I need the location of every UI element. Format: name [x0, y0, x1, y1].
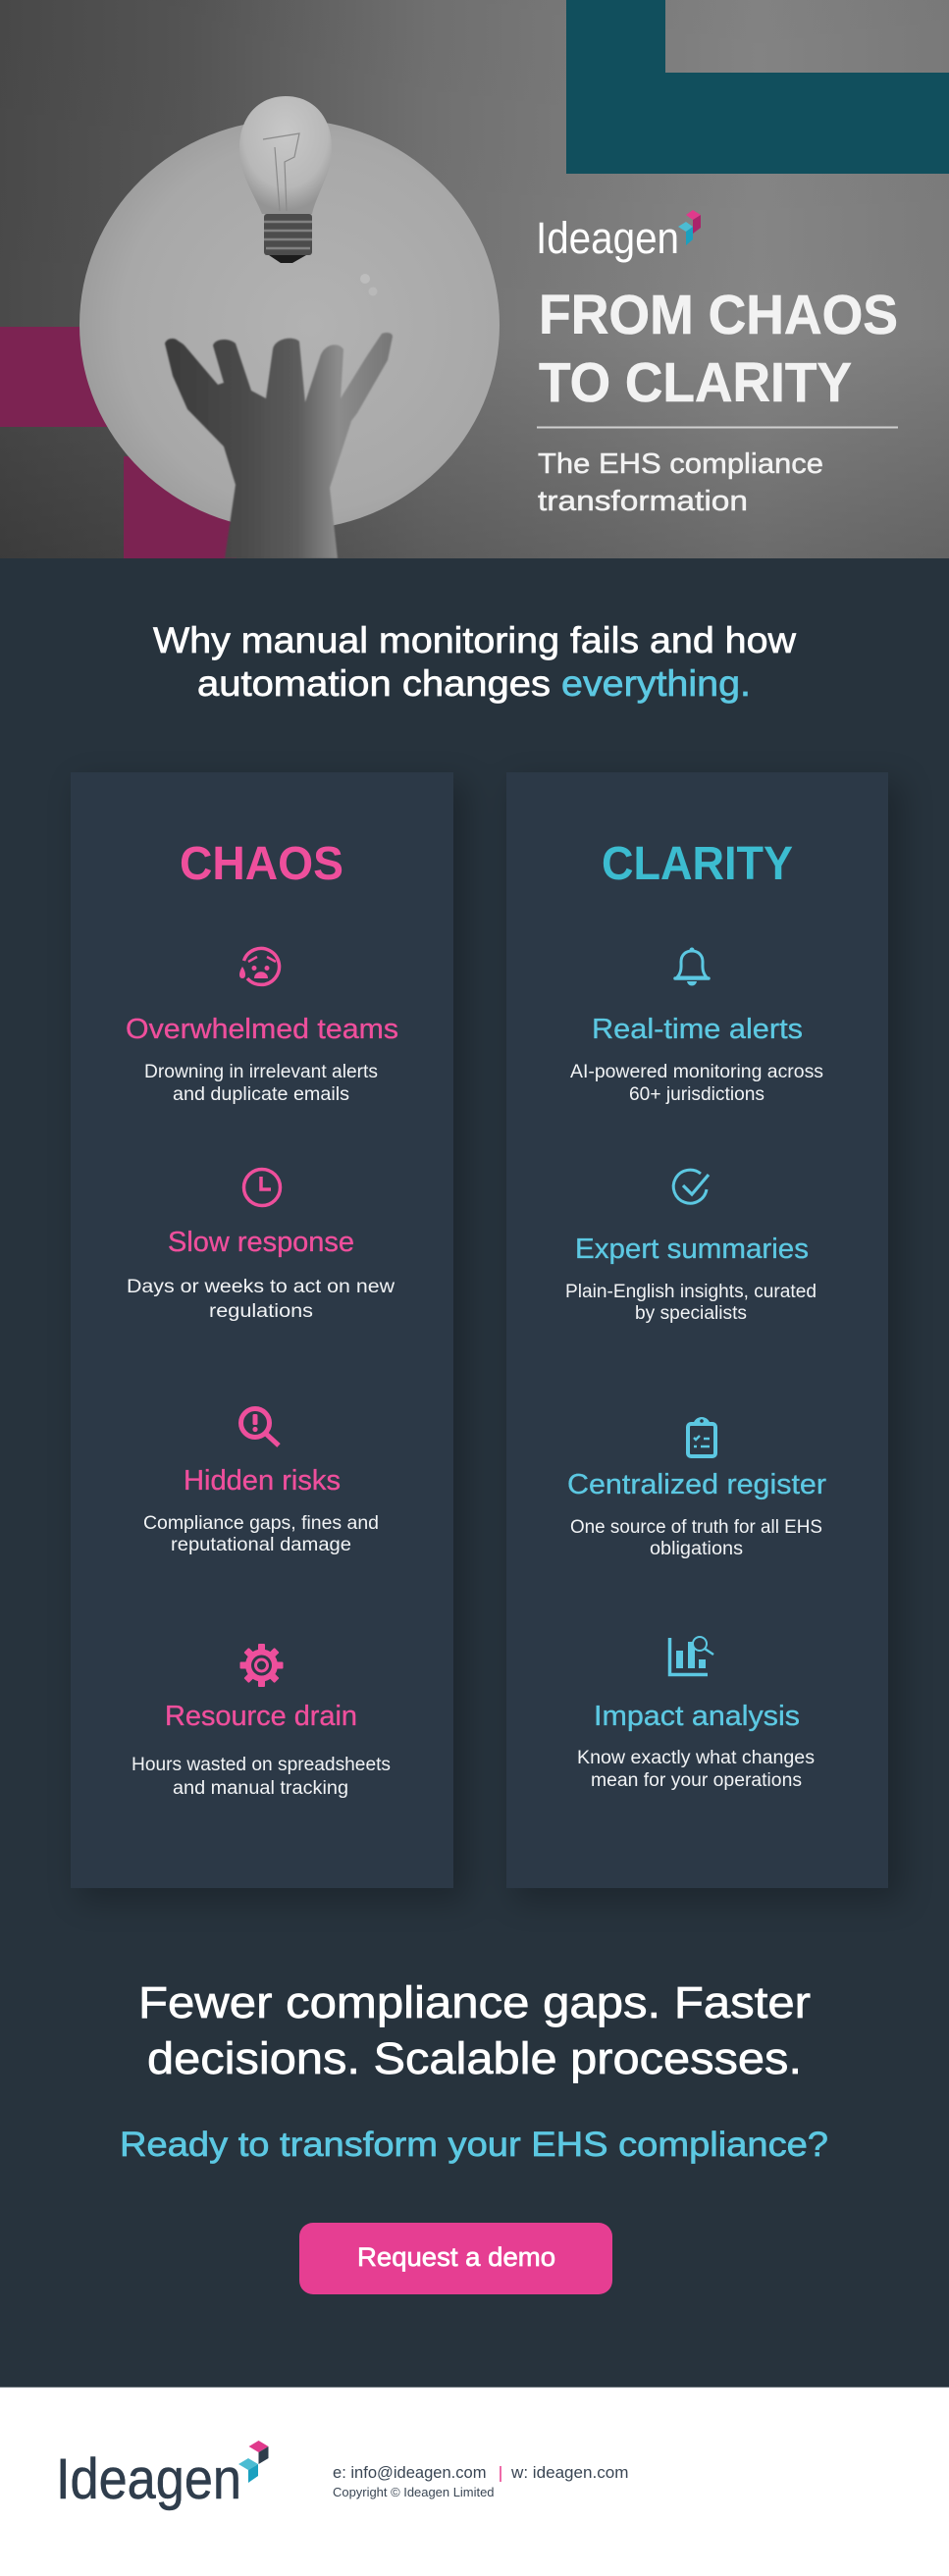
hero photo background — [0, 0, 949, 558]
item: impact analysis — [577, 1701, 815, 1791]
item: hidden risks: reputational damage — [171, 1535, 351, 1555]
item: resource drain: Hours wasted on spreadsheets — [132, 1755, 391, 1775]
item: real-time alerts: 60+ jurisdictions — [629, 1084, 764, 1105]
magenta block left — [0, 327, 118, 427]
closing statement — [138, 1977, 811, 2083]
icon: clock — [243, 1170, 281, 1205]
item: centralized register — [567, 1469, 826, 1559]
intro heading: everything. — [561, 663, 751, 704]
light disc — [79, 120, 500, 530]
item: overwhelmed teams — [126, 1014, 398, 1105]
intro heading — [153, 620, 796, 704]
item: overwhelmed teams: Overwhelmed teams — [126, 1014, 398, 1045]
item: impact analysis: mean for your operations — [591, 1770, 802, 1791]
item: overwhelmed teams: and duplicate emails — [173, 1084, 349, 1105]
subtitle — [537, 426, 898, 517]
magenta block bottom — [124, 456, 237, 558]
subtitle: The EHS compliance — [538, 448, 823, 480]
item: resource drain — [132, 1701, 391, 1799]
button: request a demo — [299, 2223, 612, 2294]
icon: clipboard — [688, 1417, 715, 1456]
item: hidden risks — [143, 1465, 379, 1555]
light bulb — [239, 96, 377, 296]
item: hidden risks: Compliance gaps, fines and — [143, 1513, 379, 1534]
item: impact analysis: Know exactly what changes — [577, 1748, 815, 1768]
teal corner shape — [566, 0, 949, 174]
button: request a demo: Request a demo — [357, 2242, 555, 2272]
panel: clarity — [506, 772, 888, 1888]
item: slow response: Days or weeks to act on new — [127, 1277, 395, 1297]
closing statement: Fewer compliance gaps. Faster — [138, 1977, 811, 2027]
item: centralized register: obligations — [650, 1539, 743, 1559]
logo: Ideagen: Ideagen — [56, 2447, 241, 2511]
icon: check circle — [673, 1170, 709, 1203]
chaos heading: CHAOS — [180, 838, 343, 890]
logo: Ideagen white: Ideagen — [536, 213, 679, 263]
icon: gear — [239, 1644, 283, 1687]
panel: chaos — [71, 772, 453, 1888]
item: overwhelmed teams: Drowning in irrelevant alerts — [144, 1062, 378, 1082]
subtitle: transformation — [538, 486, 748, 517]
icon: magnifier alert — [241, 1409, 279, 1446]
clarity heading: CLARITY — [602, 838, 793, 890]
item: resource drain: Resource drain — [165, 1701, 357, 1732]
footer — [0, 2387, 949, 2576]
intro heading: Why manual monitoring fails and how — [153, 620, 796, 660]
title — [539, 294, 897, 402]
contact details — [333, 2463, 628, 2499]
panel shadows — [79, 782, 902, 1901]
icon: overwhelmed face — [239, 948, 280, 984]
icon: bell — [675, 948, 709, 985]
item: slow response — [127, 1227, 395, 1322]
item: centralized register: One source of truth for all EHS — [570, 1517, 822, 1538]
closing statement: decisions. Scalable processes. — [147, 2033, 802, 2083]
title: FROM CHAOS — [539, 284, 898, 346]
icon: chart with magnifier — [669, 1637, 713, 1674]
item: centralized register: Centralized register — [567, 1469, 826, 1500]
title: TO CLARITY — [539, 351, 852, 414]
item: real-time alerts: AI-powered monitoring across — [570, 1062, 823, 1082]
contact details: Copyright © Ideagen Limited — [333, 2485, 495, 2499]
item: resource drain: and manual tracking — [173, 1778, 348, 1799]
item: expert summaries: Expert summaries — [575, 1234, 809, 1265]
contact details: w: ideagen.com — [510, 2463, 628, 2482]
hand — [165, 333, 393, 558]
call to action question: Ready to transform your EHS compliance? — [120, 2126, 828, 2164]
item: expert summaries — [565, 1234, 817, 1324]
item: expert summaries: by specialists — [635, 1303, 747, 1324]
item: expert summaries: Plain-English insights, curated — [565, 1282, 817, 1302]
item: impact analysis: Impact analysis — [594, 1701, 800, 1732]
item: hidden risks: Hidden risks — [184, 1465, 341, 1497]
intro heading: automation changes — [197, 663, 551, 704]
item: slow response: Slow response — [168, 1227, 354, 1258]
item: slow response: regulations — [209, 1301, 313, 1322]
hero banner — [0, 0, 949, 558]
item: real-time alerts: Real-time alerts — [592, 1014, 803, 1045]
contact details: e: info@ideagen.com — [333, 2463, 487, 2482]
item: real-time alerts — [570, 1014, 823, 1105]
